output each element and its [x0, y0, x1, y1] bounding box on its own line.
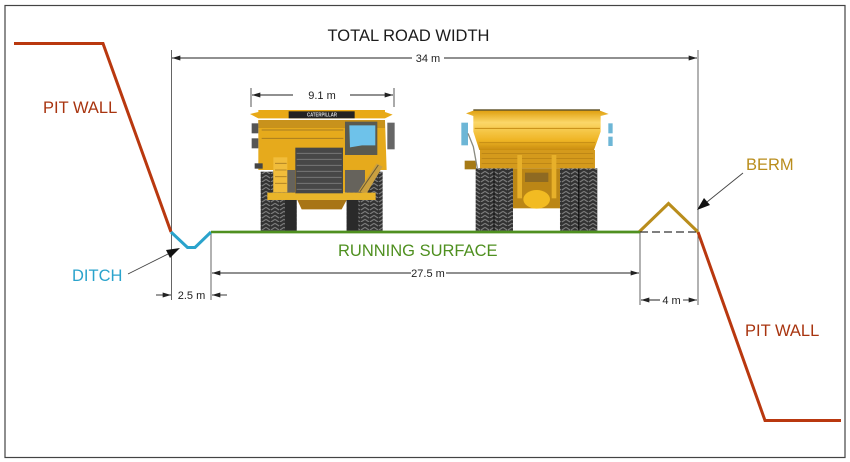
- canopy with Caterpillar badge: [250, 110, 393, 119]
- berm line: [639, 204, 698, 232]
- cab window: [345, 122, 377, 155]
- label: pit wall right: PIT WALL: [745, 322, 819, 340]
- front body: [252, 120, 395, 209]
- label: ditch: DITCH: [72, 267, 122, 285]
- ditch pointer arrow: [128, 248, 180, 274]
- radiator grille: [295, 148, 343, 193]
- rear mirrors and ladders: [461, 123, 613, 169]
- heading: total road width: TOTAL ROAD WIDTH: [328, 27, 489, 45]
- dump body: [466, 110, 609, 150]
- front tyres: [261, 172, 383, 231]
- dimension guide lines: [172, 50, 698, 305]
- ground line under wheels: [230, 231, 640, 233]
- label: running surface: RUNNING SURFACE: [338, 242, 498, 260]
- label: pit wall left: PIT WALL: [43, 99, 117, 117]
- berm base dashed line: [640, 231, 697, 233]
- pit wall right line: [698, 232, 841, 420]
- berm pointer arrow: [697, 173, 743, 210]
- truck: front view: [250, 110, 395, 231]
- dimension: 27.5 m: 27.5 m: [411, 268, 445, 280]
- dimension: 2.5 m: [156, 290, 227, 302]
- truck: rear view: [461, 110, 613, 231]
- rear axle: [480, 150, 595, 209]
- rear tyres: [476, 168, 597, 231]
- pit wall left line: [14, 44, 171, 232]
- dimension: 4 m: 4 m: [662, 295, 681, 307]
- dimension: 4 m: [641, 295, 697, 307]
- dimension: 34 m: 34 m: [416, 53, 440, 65]
- running surface line: [211, 231, 640, 233]
- dimension: 2.5 m: 2.5 m: [178, 290, 205, 302]
- label: berm: BERM: [746, 156, 794, 174]
- ditch line: [171, 232, 211, 248]
- dimension: 9.1 m: [251, 88, 394, 107]
- canopy with Caterpillar badge: CATERPILLAR: [307, 113, 337, 119]
- dimension: 9.1 m: 9.1 m: [308, 90, 336, 102]
